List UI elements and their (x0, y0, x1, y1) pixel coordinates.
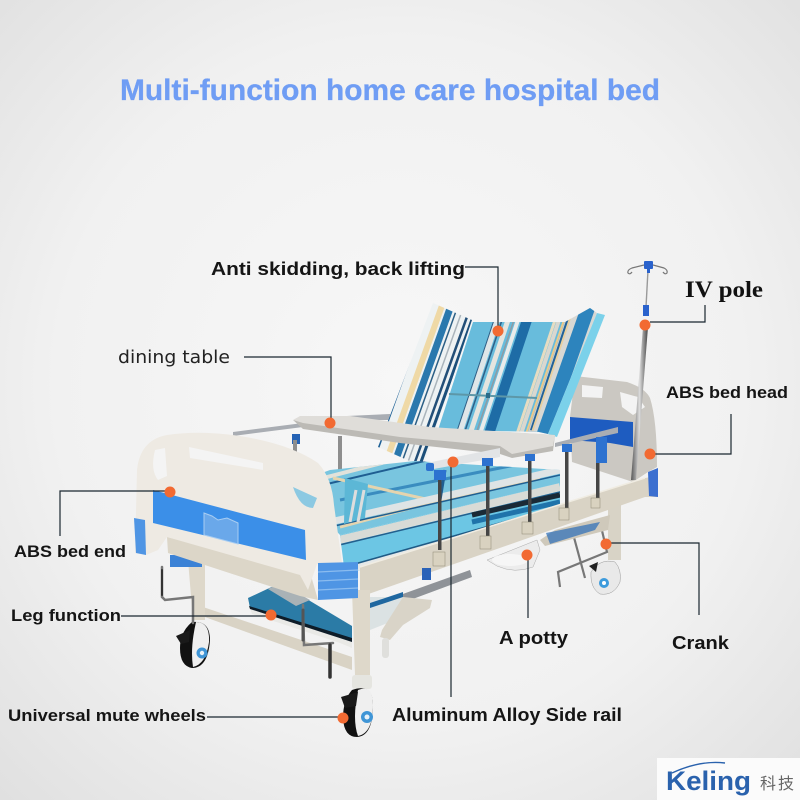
backrest center (438, 322, 565, 432)
callout: ABS bed end: ABS bed end (14, 542, 126, 561)
callout: aluminum alloy side rail (392, 456, 622, 725)
callout: IV pole (640, 277, 763, 330)
callout: anti skidding, back lifting (211, 259, 504, 336)
logo: Keling: 科技 (760, 775, 794, 793)
rear leg and caster (589, 497, 621, 594)
front right leg and universal wheel (341, 590, 373, 737)
hand cranks (162, 567, 333, 677)
dining table (293, 416, 555, 458)
near side rail (426, 427, 618, 566)
callout: a potty (499, 550, 568, 648)
IV pole (628, 261, 667, 480)
backrest left wing (378, 306, 472, 462)
under-bed beam (167, 537, 318, 600)
hospital bed illustration (134, 261, 667, 737)
callout: universal mute wheels (8, 706, 348, 725)
callout: dining table: dining table (118, 347, 230, 368)
mattress seat surface (324, 461, 560, 535)
callout: dining table (118, 347, 336, 428)
callout: IV pole: IV pole (685, 277, 763, 302)
right bed frame (360, 468, 658, 603)
mattress side face (330, 483, 560, 575)
potty (487, 540, 540, 570)
callout: aluminum alloy side rail: Aluminum Alloy Side rail (392, 705, 622, 725)
logo: Keling (657, 758, 800, 800)
callout: leg function: Leg function (11, 606, 121, 625)
callout: ABS bed head: ABS bed head (666, 383, 788, 402)
leg rest board (248, 583, 432, 658)
callout: crank (600, 538, 730, 653)
callout: leg function (11, 606, 276, 625)
backrest bar (449, 393, 537, 398)
callout: a potty: A potty (499, 628, 568, 648)
lower rail (200, 606, 352, 670)
rear bed head (570, 376, 657, 482)
callout: ABS bed end (14, 486, 176, 561)
callout: crank: Crank (672, 633, 730, 653)
far side rail (233, 414, 390, 474)
backrest right wing (530, 308, 605, 437)
callout: ABS bed head (644, 383, 788, 460)
rear crank (558, 522, 607, 587)
title: Multi-function home care hospital bed (120, 74, 660, 107)
callout: anti skidding, back lifting: Anti skidding, back lifting (211, 259, 465, 279)
callout: universal mute wheels: Universal mute wheels (8, 706, 206, 725)
front left leg and wheel (170, 555, 210, 668)
ABS bed end (134, 433, 358, 600)
logo: Keling: Keling (666, 766, 751, 796)
